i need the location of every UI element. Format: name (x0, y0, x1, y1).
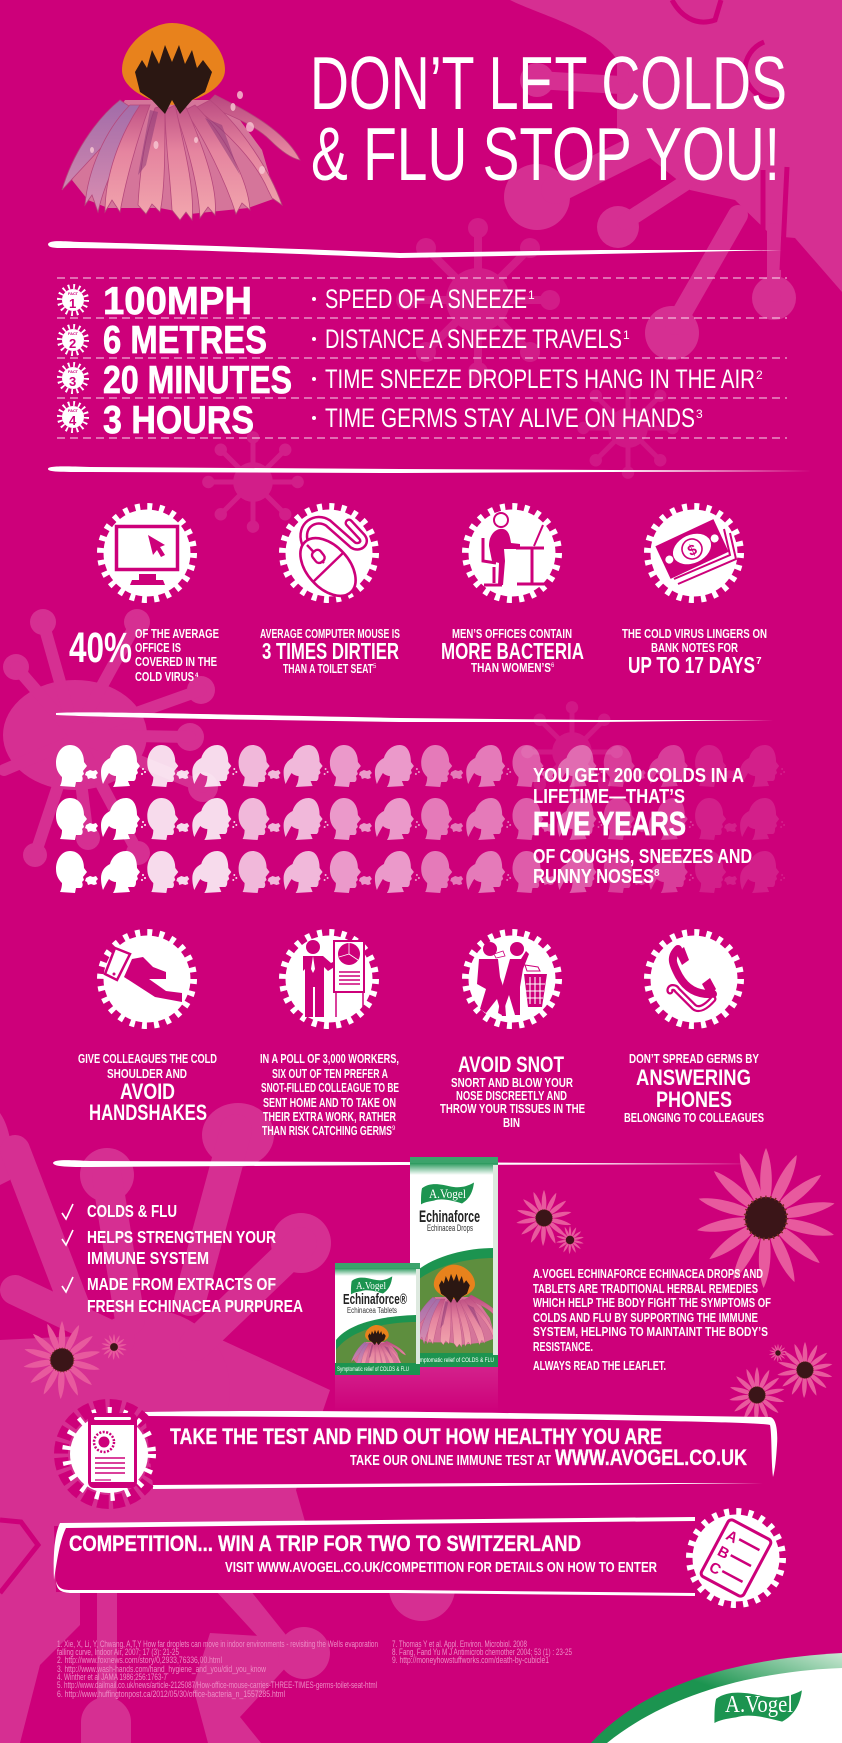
icon: fact 2: FACT (68, 331, 79, 336)
tip: poll of workers: THAN RISK CATCHING GERMS (262, 1124, 392, 1138)
icon: bank notes (648, 506, 740, 600)
benefits checklist (62, 1201, 303, 1316)
banner: competition: VISIT WWW.AVOGEL.CO.UK/COMPETITION FOR DETAILS ON HOW TO ENTER (225, 1560, 657, 1576)
stat: mouse dirtier: 5 (373, 664, 377, 670)
fact: 6 metres: DISTANCE A SNEEZE TRAVELS (325, 324, 622, 354)
tip: answering phones: BELONGING TO COLLEAGUES (624, 1111, 764, 1125)
fact: 100mph: 1 (528, 288, 535, 302)
tip: avoid snot: SNORT AND BLOW YOUR (451, 1076, 573, 1090)
tip: avoid handshakes (78, 1052, 217, 1125)
tip: avoid snot (440, 1052, 585, 1130)
corner swoosh (591, 1653, 842, 1743)
tip: avoid snot: AVOID SNOT (458, 1052, 564, 1077)
benefits checklist: MADE FROM EXTRACTS OF (87, 1274, 276, 1294)
fact: 3 hours: 3 (696, 407, 703, 421)
brush divider (48, 241, 782, 258)
footnotes left column (57, 1639, 378, 1699)
icon: computer mouse (282, 506, 376, 606)
flower: large top right (696, 1148, 836, 1288)
stat: bank notes: 7 (756, 656, 762, 667)
fact: 20 minutes: 2 (756, 368, 763, 382)
icon: multiple choice clipboard: A (723, 1527, 741, 1547)
tip: answering phones: DON’T SPREAD GERMS BY (629, 1052, 760, 1066)
tip: poll of workers: THEIR EXTRA WORK, RATHER (263, 1110, 396, 1124)
tip: answering phones: ANSWERING (636, 1065, 751, 1090)
footnotes right column: 9. http://moneyhowstuffworks.com/death-by-cubicle1 (392, 1655, 549, 1665)
fact: 3 hours (103, 399, 703, 442)
stat: mouse dirtier (260, 627, 400, 676)
tip: poll of workers: 9 (392, 1126, 396, 1132)
stat: men's offices: MORE BACTERIA (441, 638, 584, 664)
callout: five years: FIVE YEARS (533, 805, 686, 842)
icon: bank notes: $ (685, 541, 700, 560)
product: echinaforce drops box: Symptomatic relief of COLDS & FLU (414, 1357, 494, 1364)
fact: 6 metres: 1 (623, 328, 630, 342)
product description: TABLETS ARE TRADITIONAL HERBAL REMEDIES (533, 1281, 758, 1296)
benefits checklist: IMMUNE SYSTEM (87, 1248, 209, 1268)
icon: fact 2: 2 (69, 336, 76, 351)
tip: avoid handshakes: HANDSHAKES (89, 1100, 207, 1125)
product: echinaforce tablets box: Echinaforce® (343, 1291, 407, 1308)
tip: poll of workers (260, 1052, 399, 1138)
icon: fact 4 (60, 404, 86, 430)
stat: bank notes: UP TO 17 DAYS (628, 652, 755, 678)
icon: fact 1: FACT (68, 291, 79, 296)
logo: A.Vogel (714, 1690, 802, 1723)
callout: five years: LIFETIME—THAT’S (533, 785, 685, 808)
tip: avoid handshakes: SHOULDER AND (107, 1067, 187, 1081)
fact: 20 minutes (103, 359, 763, 402)
fact: 6 metres: 6 METRES (103, 319, 267, 362)
icon: fact 4: 4 (69, 413, 77, 428)
flower: left cluster (23, 1321, 127, 1399)
icon: monitor (100, 506, 194, 600)
callout: five years (533, 764, 752, 888)
fact: 100mph: SPEED OF A SNEEZE (325, 284, 527, 314)
fact: 3 hours: TIME GERMS STAY ALIVE ON HANDS (325, 403, 695, 433)
stat: 40 percent: OFFICE IS (135, 641, 181, 655)
tip: poll of workers: IN A POLL OF 3,000 WORKERS, (260, 1052, 399, 1066)
tip: answering phones (624, 1052, 764, 1125)
icon: fact 2 (60, 326, 86, 354)
stat: men's offices (441, 627, 584, 675)
tip: poll of workers: SENT HOME AND TO TAKE ON (263, 1096, 396, 1110)
stat: men's offices: 6 (551, 663, 555, 669)
callout: five years: YOU GET 200 COLDS IN A (533, 764, 744, 787)
stat: bank notes: BANK NOTES FOR (651, 641, 738, 655)
footnotes left column: 6. http://www.huffingtonpost.ca/2012/05/30/office-bacteria_n_1557285.html (57, 1689, 285, 1699)
tip: poll of workers: SIX OUT OF TEN PREFER A (272, 1067, 388, 1081)
product description: ALWAYS READ THE LEAFLET. (533, 1358, 666, 1373)
product: echinaforce drops box (410, 1157, 505, 1367)
fact: 100mph (103, 280, 535, 323)
icon: fact 3: FACT (68, 369, 79, 374)
stat: 40 percent: COLD VIRUS (135, 670, 194, 684)
product: echinaforce drops box: A.Vogel (429, 1186, 466, 1201)
icon: fact 3 (60, 364, 86, 392)
product reflection (335, 1367, 498, 1412)
footnotes right column (392, 1639, 572, 1665)
product: echinaforce tablets box: Symptomatic relief of COLDS & FLU (337, 1366, 409, 1373)
fact: 100mph: 100MPH (103, 280, 252, 323)
product description: COLDS AND FLU BY SUPPORTING THE IMMUNE (533, 1310, 758, 1325)
stat: men's offices: THAN WOMEN’S (471, 661, 551, 675)
icon: smartphone immune test (61, 1406, 157, 1502)
flower: small cluster centre (516, 1190, 584, 1254)
footnotes left column: 5. http://www.dailmail.co.uk/news/article-2125087/How-office-mouse-carries-THREE-TIMES-germs-toilet-seat-html (57, 1680, 377, 1690)
tip: avoid handshakes: AVOID (120, 1079, 175, 1104)
stat: 40 percent: 4 (195, 673, 199, 679)
callout: five years: OF COUGHS, SNEEZES AND (533, 845, 752, 868)
icon: presenter with flipchart (282, 932, 376, 1026)
footnotes left column: 2. http://www.foxnews.com/story/0,2933,76336,00.html (57, 1655, 222, 1665)
tip: poll of workers: SNOT-FILLED COLLEAGUE TO BE (261, 1081, 399, 1095)
tip: avoid snot: BIN (503, 1116, 520, 1130)
stat: 40 percent: OF THE AVERAGE (135, 627, 219, 641)
tip: avoid handshakes: GIVE COLLEAGUES THE COLD (78, 1052, 217, 1066)
fact: 3 hours: 3 HOURS (103, 399, 254, 442)
product description (533, 1266, 771, 1373)
stat: men's offices: MEN’S OFFICES CONTAIN (452, 627, 572, 641)
fact: 6 metres (103, 319, 630, 362)
icon: telephone handset (648, 932, 740, 1026)
tip: answering phones: PHONES (656, 1087, 732, 1112)
stat: 40 percent: COVERED IN THE (135, 655, 217, 669)
icon: people and tissue bin (466, 932, 558, 1026)
product: echinaforce tablets box: A.Vogel (356, 1281, 386, 1292)
benefits checklist: FRESH ECHINACEA PURPUREA (87, 1296, 303, 1316)
stat: mouse dirtier: THAN A TOILET SEAT (283, 662, 373, 676)
product description: RESISTANCE. (533, 1339, 593, 1354)
banner: immune test: WWW.AVOGEL.CO.UK (555, 1445, 747, 1470)
stat: mouse dirtier: AVERAGE COMPUTER MOUSE IS (260, 627, 400, 641)
stat: mouse dirtier: 3 TIMES DIRTIER (262, 638, 399, 664)
icon: fact 1: 1 (69, 296, 76, 311)
benefits checklist: COLDS & FLU (87, 1201, 177, 1221)
tip: avoid snot: NOSE DISCREETLY AND (456, 1089, 567, 1103)
icon: man at desk (466, 506, 558, 600)
icon: fact 1 (60, 286, 86, 314)
footnotes right column: 7. Thomas Y et al. Appl. Environ. Microbiol. 2008 (392, 1639, 527, 1649)
footnotes left column: 4. Winther et al JAMA 1986;256:1763-7 (57, 1672, 167, 1682)
stat: 40 percent: 40% (69, 624, 132, 672)
flower: right cluster (729, 1342, 833, 1423)
fact: 20 minutes: 20 MINUTES (103, 359, 292, 402)
icon: hand refusing handshake (100, 932, 194, 1026)
flower photo (62, 23, 300, 220)
banner: competition (54, 1517, 695, 1596)
product: echinaforce drops box: Echinaforce (419, 1207, 480, 1226)
product: echinaforce tablets box (335, 1263, 420, 1375)
banner: immune test: TAKE THE TEST AND FIND OUT HOW HEALTHY YOU ARE (170, 1424, 662, 1449)
pictogram: rows of sneezing heads (56, 745, 785, 893)
icon: multiple choice clipboard (690, 1512, 782, 1604)
product: echinaforce tablets box: Echinacea Tablets (347, 1306, 397, 1315)
title (310, 41, 787, 196)
stat: bank notes (622, 627, 767, 678)
stat: 40 percent (69, 624, 219, 684)
banner: competition: COMPETITION... WIN A TRIP FOR TWO TO SWITZERLAND (69, 1531, 581, 1556)
benefits checklist: HELPS STRENGTHEN YOUR (87, 1227, 276, 1247)
icon: multiple choice clipboard: C (706, 1559, 724, 1579)
footnotes left column: 1. Xie, X, Li, Y, Chwang, A,T,Y How far droplets can move in indoor environments - revisiting the Wells evaporation (57, 1639, 378, 1649)
callout: five years: RUNNY NOSES (533, 865, 654, 888)
footnotes left column: 3. http://www.wash-hands.com/hand_hygiene_and_you/did_you_know (57, 1664, 266, 1674)
product: echinaforce drops box: Echinacea Drops (427, 1223, 473, 1233)
callout: five years: 8 (654, 868, 660, 879)
icon: fact 4: FACT (68, 408, 79, 413)
footnotes left column: falling curve, Indoor Air, 2007; 17 (3): 21-25 (57, 1647, 179, 1657)
footnotes right column: 8. Fang, Fand Yu M J Antimicrob chemother 2004; 53 (1) : 23-25 (392, 1647, 572, 1657)
tip: avoid snot: THROW YOUR TISSUES IN THE (440, 1102, 585, 1116)
banner: immune test (145, 1411, 777, 1489)
logo: A.Vogel: A.Vogel (725, 1692, 793, 1718)
banner: immune test: TAKE OUR ONLINE IMMUNE TEST AT (350, 1453, 551, 1469)
product description: SYSTEM, HELPING TO MAINTAINT THE BODY’S (533, 1324, 768, 1339)
icon: multiple choice clipboard: B (715, 1543, 732, 1563)
icon: fact 3: 3 (69, 374, 76, 389)
panel: sneeze facts (60, 280, 763, 442)
stat: bank notes: THE COLD VIRUS LINGERS ON (622, 627, 767, 641)
